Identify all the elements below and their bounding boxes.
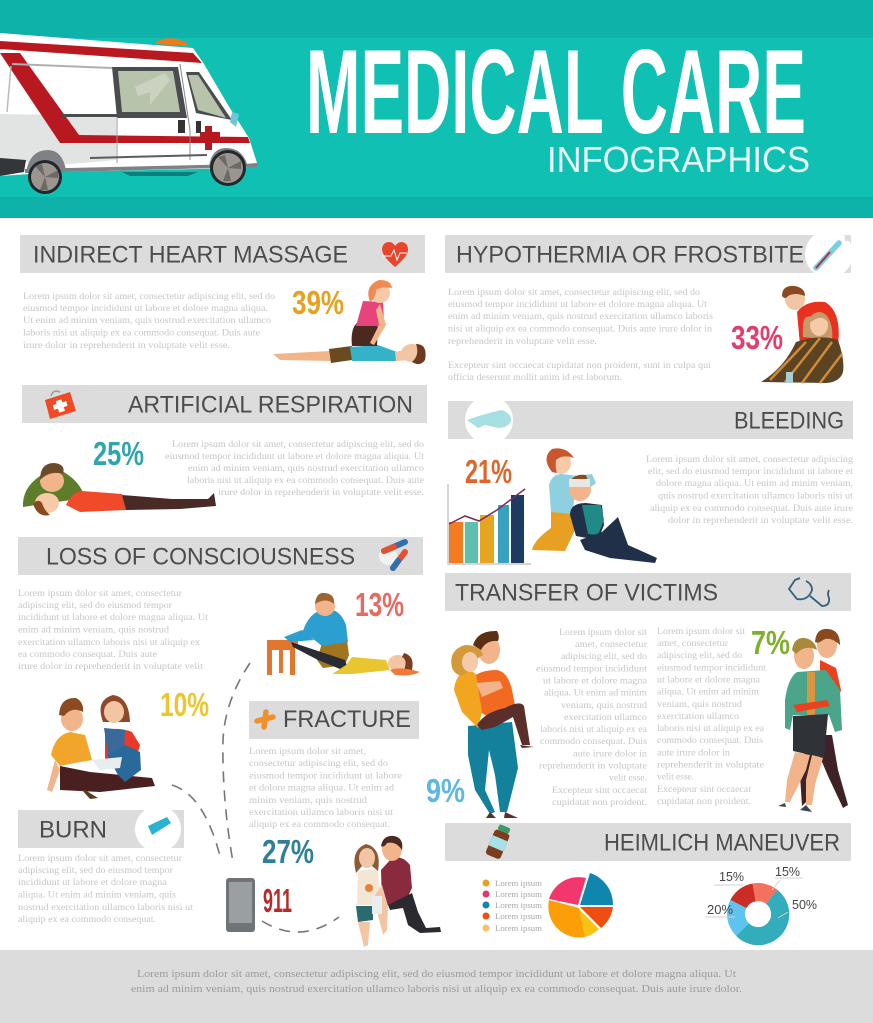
text column right: veniam, quis nostrud xyxy=(657,699,742,710)
text block: nisi ut aliquip ex ea commodo consequat. Duis aute irure dolor in xyxy=(448,324,712,334)
illustration: raised legs xyxy=(267,593,420,676)
footer: Lorem ipsum dolor sit amet, consectetur adipiscing elit, sed do eiusmod tempor incididunt ut labore et dolore magna aliqua. Ut xyxy=(137,968,736,980)
text block: elit, sed do eiusmod tempor incididunt ut labore et xyxy=(648,466,853,477)
icon: orange cross xyxy=(257,712,273,727)
icon: bandage roll xyxy=(467,410,511,428)
bar chart xyxy=(448,484,531,564)
section: burn victim couple xyxy=(47,686,209,799)
text column left: laboris nisi ut aliquip ex ea xyxy=(540,724,648,735)
percentage: 21% xyxy=(465,453,512,490)
heading bar: FRACTURE xyxy=(283,706,411,733)
icon: bandage xyxy=(148,817,171,835)
text block: ea commodo consequat. Duis aute xyxy=(18,649,157,660)
icon: first aid kit xyxy=(45,391,76,419)
text column right: aliqua. Ut enim ad minim xyxy=(657,686,760,698)
heading bar xyxy=(448,396,853,444)
legend: Lorem ipsum xyxy=(495,911,542,921)
text column left: adipiscing elit, sed do xyxy=(561,651,647,662)
percentage: 27% xyxy=(262,833,314,870)
legend: Lorem ipsum xyxy=(495,878,542,888)
section: bleeding xyxy=(448,396,853,564)
text block: exercitation ullamco laboris nisi ut aliquip ex xyxy=(18,637,200,648)
text column left: Excepteur sint occaecat xyxy=(552,785,647,796)
percentage: 13% xyxy=(355,586,404,623)
text block: Excepteur sint occaecat cupidatat non proident, sunt in culpa qui xyxy=(448,360,711,371)
text block: consectetur adipiscing elit, sed do xyxy=(249,758,388,769)
text column right: adipiscing elit, sed do xyxy=(657,650,742,661)
donut chart: 50% xyxy=(792,897,817,912)
text block xyxy=(249,746,402,830)
heading bar: HEIMLICH MANEUVER xyxy=(604,830,840,856)
illustration: head bandage xyxy=(532,448,657,563)
emergency number: 911 xyxy=(263,882,292,919)
text block: Lorem ipsum dolor sit amet, consectetur xyxy=(18,853,183,864)
text block: adipiscing elit, sed do eiusmod tempor xyxy=(18,865,174,876)
text column left: eiusmod tempor incididunt xyxy=(536,664,647,674)
illustration: supporting person xyxy=(778,629,848,812)
text column left: commodo consequat. Duis xyxy=(540,736,647,747)
footer: enim ad minim veniam, quis nostrud exercitation ullamco laboris nisi ut aliquip ex ea commodo consequat. Duis aute irure dolor. xyxy=(131,983,742,995)
text column left: ut labore et dolore magna xyxy=(543,676,648,686)
icon: thermometer xyxy=(816,243,839,268)
footer xyxy=(0,950,873,1023)
text block: quis nostrud exercitation ullamco laboris nisi ut xyxy=(658,490,853,502)
text block: enim ad minim veniam, quis nostrud exercitation ullamco laboris xyxy=(448,311,713,322)
text block: aliquip ex ea commodo consequat. xyxy=(249,819,390,830)
percentage: 7: 7% xyxy=(751,624,790,661)
text block: incididunt ut labore et dolore magna xyxy=(18,877,168,888)
heading bar xyxy=(22,385,427,423)
text block: reprehenderit in voluptate velit esse. xyxy=(448,336,597,347)
text block: Lorem ipsum dolor sit amet, consectetur adipiscing elit, sed do xyxy=(23,291,275,302)
text block: officia deserunt mollit anim id est laborum. xyxy=(448,372,622,383)
icon: medicine bottle xyxy=(485,823,513,860)
heading bar: INDIRECT HEART MASSAGE xyxy=(33,242,348,268)
illustration: leg splint xyxy=(354,836,441,947)
text block: enim ad minim veniam, quis nostrud exercitation ullamco xyxy=(188,463,424,474)
legend xyxy=(482,878,542,933)
text block: dolore magna aliqua. Ut enim ad minim veniam, xyxy=(656,478,853,489)
section: transfer of victims xyxy=(426,573,851,818)
text block: aliquip ex ea commodo consequat. xyxy=(18,914,156,925)
percentage: 10% xyxy=(160,686,209,723)
text block: et dolore magna aliqua. Ut enim ad xyxy=(249,782,394,794)
heading bar: BURN xyxy=(39,816,107,844)
header banner xyxy=(0,0,873,218)
text block: laboris nisi ut aliquip ex ea commodo consequat. Duis aute xyxy=(23,328,260,338)
heading bar xyxy=(18,537,423,575)
text block: enim ad minim veniam, quis nostrud xyxy=(18,624,169,636)
heading bar: HYPOTHERMIA OR FROSTBITE xyxy=(456,242,804,268)
illustration: couple sitting xyxy=(47,695,155,799)
text block: Lorem ipsum dolor sit amet, consectetur adipiscing elit, sed do xyxy=(448,287,700,298)
icon: heart xyxy=(382,242,408,267)
text block: adipiscing elit, sed do eiusmod tempor xyxy=(18,600,173,611)
heading bar xyxy=(18,806,184,852)
text column left: velit esse. xyxy=(609,772,647,784)
text column left: reprehenderit in voluptate xyxy=(539,760,647,772)
donut chart xyxy=(705,864,817,945)
donut chart: 20% xyxy=(707,902,733,917)
text column right: aute irure dolor in xyxy=(657,748,730,758)
text column right: Lorem ipsum dolor sit xyxy=(657,626,745,637)
text column right: laboris nisi ut aliquip ex ea xyxy=(657,723,765,734)
text block: irure dolor in reprehenderit in voluptate velit esse. xyxy=(218,487,424,498)
text block: eiusmod tempor incididunt ut labore et dolore magna aliqua. xyxy=(23,303,268,314)
text block: dolor in reprehenderit in voluptate velit esse. xyxy=(668,515,853,526)
text block: laboris nisi ut aliquip ex ea commodo consequat. Duis aute xyxy=(187,475,424,486)
section: loss of consciousness xyxy=(18,537,423,676)
text block: exercitation ullamco laboris nisi ut xyxy=(249,807,393,818)
text block: Lorem ipsum dolor sit amet, consectetur adipiscing xyxy=(646,454,853,465)
text block: aliqua. Ut enim ad minim veniam, quis xyxy=(18,890,176,900)
text column left: exercitation ullamco xyxy=(564,712,647,723)
text block: aliquip ex ea commodo consequat. Duis aute irure xyxy=(650,503,853,514)
heading bar: LOSS OF CONSCIOUSNESS xyxy=(46,544,355,570)
heading bar: ARTIFICIAL RESPIRATION xyxy=(128,392,413,418)
legend: Lorem ipsum xyxy=(495,923,542,933)
text column left: Lorem ipsum dolor sit xyxy=(559,627,647,638)
text column right xyxy=(657,626,766,807)
text block xyxy=(646,454,853,526)
icon: pills xyxy=(379,542,405,568)
text column right: velit esse. xyxy=(657,772,694,782)
heading bar xyxy=(445,573,851,611)
icon: phone xyxy=(226,878,255,932)
text column left: aliqua. Ut enim ad minim xyxy=(544,688,648,698)
donut chart: 15% xyxy=(775,864,800,879)
text column left: amet, consectetur xyxy=(575,639,648,650)
ambulance illustration xyxy=(0,33,257,194)
section: indirect heart massage xyxy=(20,235,426,364)
heading bar: TRANSFER OF VICTIMS xyxy=(455,580,718,606)
text block xyxy=(18,853,193,925)
heading bar xyxy=(445,230,853,278)
text column right: reprehenderit in voluptate xyxy=(657,760,764,770)
heading bar xyxy=(445,823,851,861)
text block: Ut enim ad minim veniam, quis nostrud exercitation ullamco xyxy=(23,315,271,326)
percentage: 25% xyxy=(93,435,144,472)
illustration: chest compressions xyxy=(273,280,426,364)
pie chart xyxy=(548,873,613,938)
dashed connectors xyxy=(172,663,339,932)
heading bar xyxy=(20,235,425,273)
text block: Lorem ipsum dolor sit amet, consectetur xyxy=(18,588,183,599)
donut chart: 15% xyxy=(719,869,744,884)
text column left: aute irure dolor in xyxy=(573,748,647,760)
text block: Lorem ipsum dolor sit amet, consectetur adipiscing elit, sed do xyxy=(172,439,424,450)
text block: eiusmod tempor incididunt ut labore et dolore magna aliqua. Ut xyxy=(448,299,707,310)
text column right: exercitation ullamco xyxy=(657,711,739,722)
text column left: veniam, quis nostrud xyxy=(561,700,647,711)
illustration: mouth to mouth xyxy=(23,463,216,516)
text block: irure dolor in reprehenderit in voluptate velit esse. xyxy=(23,340,230,351)
section: fracture xyxy=(226,701,441,947)
percentage: 39% xyxy=(292,284,344,321)
text block: minim veniam, quis nostrud xyxy=(249,795,367,806)
text column right: eiusmod tempor incididunt xyxy=(657,662,766,674)
text block xyxy=(165,439,424,498)
text block: nostrud exercitation ullamco laboris nisi ut xyxy=(18,902,193,913)
text block xyxy=(18,588,208,672)
heading bar: BLEEDING xyxy=(734,408,844,434)
illustration: blanket xyxy=(761,286,843,383)
text block: eiusmod tempor incididunt ut labore xyxy=(249,770,402,782)
text block: eiusmod tempor incididunt ut labore et dolore magna aliqua. Ut xyxy=(165,451,424,462)
text block xyxy=(23,291,275,351)
text block: Lorem ipsum dolor sit amet, xyxy=(249,746,366,757)
text column right: cupidatat non proident. xyxy=(657,796,751,807)
section: artificial respiration xyxy=(22,385,427,516)
text column right: Excepteur sint occaecat xyxy=(657,784,751,795)
section: hypothermia or frostbite xyxy=(445,230,853,383)
text block: incididunt ut labore et dolore magna aliqua. Ut xyxy=(18,612,208,623)
percentage: 9: 9% xyxy=(426,772,465,809)
percentage: 33% xyxy=(731,319,783,356)
text column right: commodo consequat. Duis xyxy=(657,735,763,746)
text column right: ut labore et dolore magna xyxy=(657,674,761,686)
text block: irure dolor in reprehenderit in voluptate velit xyxy=(18,661,203,672)
legend: Lorem ipsum xyxy=(495,889,542,899)
text column left xyxy=(536,627,648,808)
illustration: carrying person xyxy=(451,631,534,818)
text column left: cupidatat non proident. xyxy=(552,797,647,808)
legend: Lorem ipsum xyxy=(495,900,542,910)
text block xyxy=(448,287,713,383)
text column right: amet, consectetur xyxy=(657,638,729,649)
subtitle: INFOGRAPHICS xyxy=(547,139,810,180)
section: heimlich maneuver xyxy=(445,823,851,945)
section: burn xyxy=(18,806,193,925)
icon: stethoscope xyxy=(789,578,829,606)
heading bar xyxy=(249,701,419,739)
